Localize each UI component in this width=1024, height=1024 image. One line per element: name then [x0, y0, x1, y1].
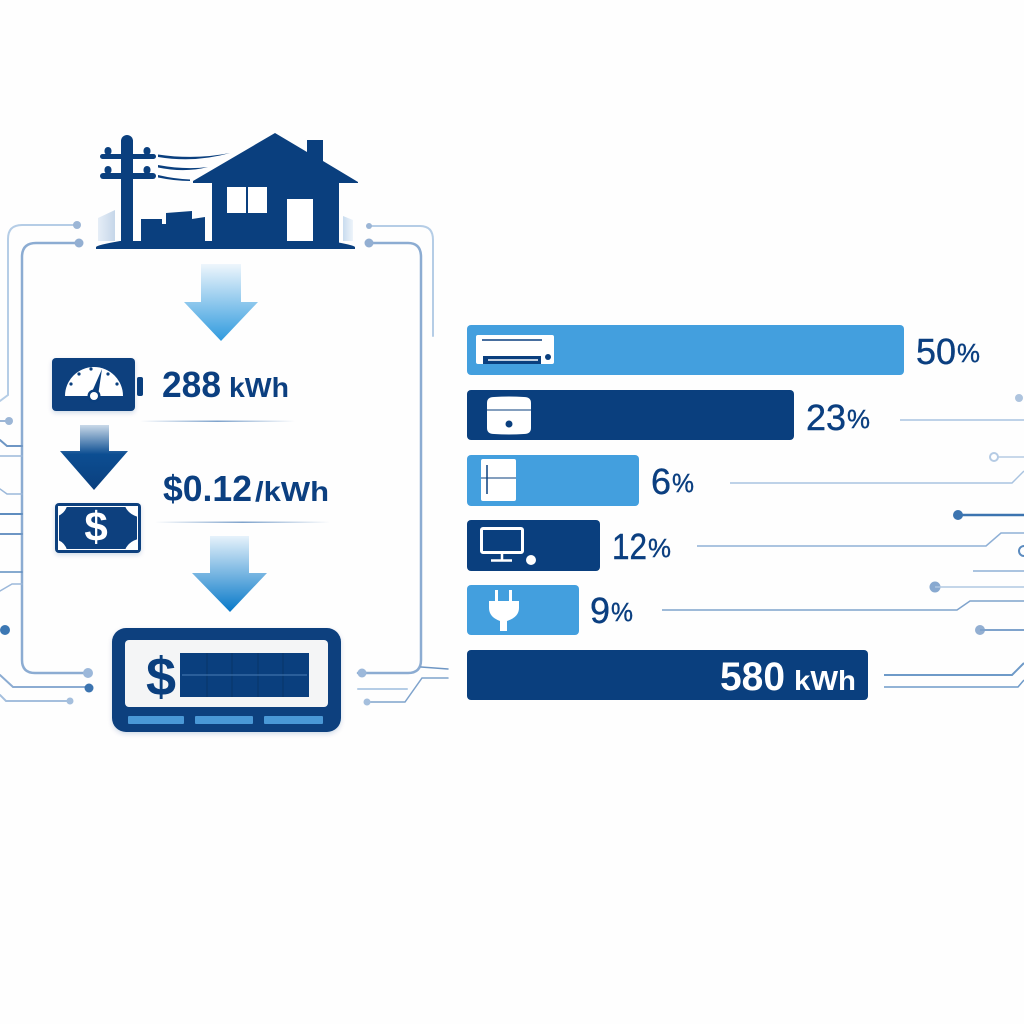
icon: computer — [482, 528, 536, 565]
label: 23%: % — [847, 404, 870, 434]
icon: house with power pole — [96, 133, 358, 249]
icon: water heater — [487, 396, 531, 434]
bar: air conditioning 50% — [467, 325, 980, 375]
bar: other plug loads 9% — [467, 585, 633, 635]
icon: dollar bill: $ — [84, 503, 108, 550]
panel: bill total display: $ — [146, 647, 176, 707]
value: monthly consumption: 288 — [162, 364, 221, 405]
label: 23%: 23 — [806, 397, 846, 438]
value: price per kWh: $0.12 — [163, 468, 252, 509]
bar: total 580 kWh: 580 — [720, 655, 785, 699]
circuit traces: left side — [0, 221, 94, 704]
label: 12% — [612, 526, 671, 567]
circuit traces: centre right — [358, 223, 448, 706]
city buildings — [141, 211, 205, 241]
label: 50%: % — [957, 338, 980, 368]
bar: total 580 kWh: kWh — [794, 665, 856, 696]
bar: water heater 23% — [467, 390, 870, 440]
panel: bill total display — [112, 628, 341, 732]
bar: total 580 kWh — [467, 650, 868, 700]
icon: plug — [489, 590, 519, 631]
bar: refrigerator 6% — [467, 455, 694, 506]
value: monthly consumption — [162, 364, 289, 405]
power pole — [100, 135, 156, 243]
icon: dollar bill — [55, 503, 141, 553]
power lines — [158, 153, 230, 181]
arrow: house to meter — [184, 264, 258, 341]
icon: refrigerator — [481, 459, 516, 501]
icon: energy meter — [52, 358, 143, 411]
bar: electronics 12% — [467, 520, 671, 571]
label: 6% — [651, 461, 694, 502]
ground — [96, 241, 355, 249]
value: price per kWh: /kWh — [255, 476, 329, 507]
label: 50%: 50 — [916, 331, 956, 372]
house — [193, 133, 358, 243]
value: price per kWh — [163, 468, 329, 509]
label: 23% — [806, 397, 870, 438]
circuit traces: right side — [662, 394, 1024, 687]
label: 9% — [590, 590, 633, 631]
label: 6%: 6 — [651, 461, 671, 502]
label: 12%: % — [648, 533, 671, 563]
label: 9%: 9 — [590, 590, 610, 631]
icon: air conditioner — [476, 335, 554, 364]
arrow: cash to bill — [192, 536, 267, 612]
label: 6%: % — [672, 468, 694, 498]
label: 9%: % — [611, 597, 633, 627]
arrow: meter to cash — [60, 425, 128, 490]
value: monthly consumption: kWh — [229, 372, 289, 403]
label: 12%: 12 — [612, 526, 647, 567]
label: 50% — [916, 331, 980, 372]
